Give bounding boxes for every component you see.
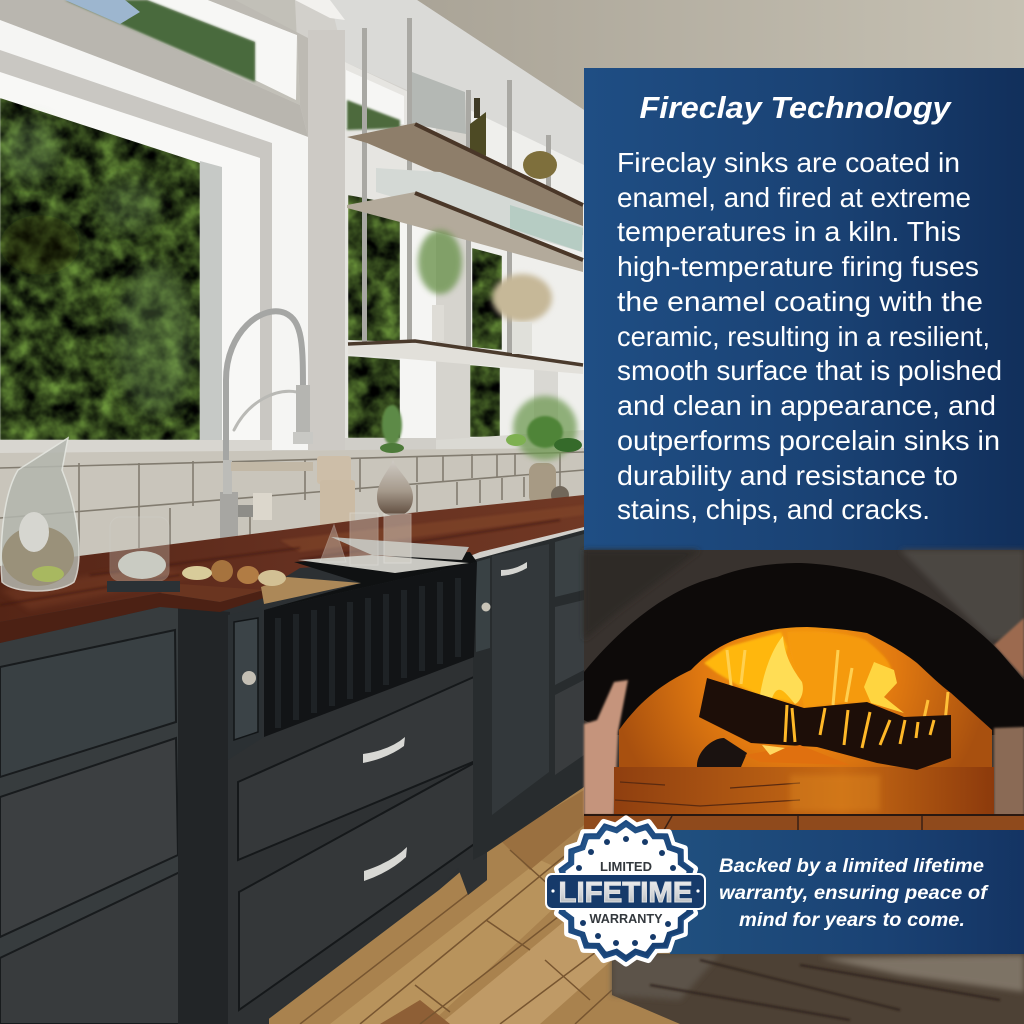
open wood shelves — [347, 18, 583, 374]
lower sink cabinet — [228, 650, 487, 1024]
garden foliage — [0, 98, 200, 440]
soffit wash — [330, 0, 584, 170]
dots — [576, 836, 676, 946]
body text: high-temperature firing fuses — [617, 251, 979, 282]
warranty band — [670, 830, 1024, 954]
oven floor — [614, 767, 994, 815]
glass pitcher and tumblers — [1, 438, 411, 592]
warranty text: mind for years to come. — [739, 910, 965, 931]
body text: smooth surface that is polished — [617, 355, 1002, 386]
fluted farmhouse sink — [264, 537, 477, 737]
bottles — [412, 72, 466, 134]
foliage light patches — [0, 120, 195, 415]
body text: the enamel coating with the — [617, 286, 983, 317]
center post and small door — [178, 607, 262, 1024]
scalloped white edge — [554, 819, 698, 963]
warranty text — [719, 856, 989, 931]
ribbon — [546, 874, 705, 909]
left cabinet — [0, 607, 190, 1024]
lower shelf — [348, 340, 583, 374]
warranty text: Backed by a limited lifetime — [719, 856, 984, 877]
white center — [564, 829, 688, 953]
middle shelf — [347, 192, 583, 272]
top transom window — [0, 0, 345, 137]
stone wall — [584, 550, 1024, 830]
corner bricks — [994, 618, 1024, 678]
label: lifetime: LIFETIME — [558, 877, 692, 909]
mugs and vases — [317, 396, 582, 532]
brick pillars — [584, 680, 628, 815]
body text: outperforms porcelain sinks in — [617, 425, 1000, 456]
body text: and clean in appearance, and — [617, 390, 996, 421]
butcher block countertop — [0, 495, 584, 643]
base wall — [0, 0, 584, 560]
panel: fireclay technology text — [584, 68, 1024, 550]
body text: stains, chips, and cracks. — [617, 494, 930, 525]
faucet — [220, 311, 313, 554]
glassware — [376, 168, 583, 252]
top shelf — [347, 123, 583, 235]
right windows — [345, 62, 584, 452]
leafy plants — [380, 396, 582, 460]
plant on shelf — [418, 230, 462, 294]
wood plank floor — [262, 785, 700, 1024]
scalloped blue ring — [556, 821, 696, 961]
heading: Fireclay Technology — [640, 90, 952, 125]
warranty text: warranty, ensuring peace of — [719, 883, 989, 904]
photo: wood-fired kiln — [584, 550, 1024, 830]
limited lifetime warranty badge — [546, 819, 705, 963]
black soot arch — [584, 563, 1024, 735]
cutting board and mushrooms — [182, 560, 361, 604]
backsplash tiles — [0, 448, 584, 566]
right cabinets — [473, 530, 584, 860]
oven interior — [619, 627, 992, 770]
body text — [617, 147, 1002, 525]
body text: Fireclay sinks are coated in — [617, 147, 960, 178]
flames — [704, 631, 948, 728]
yellow ornament — [523, 151, 557, 179]
drawer handles — [363, 737, 405, 763]
main window — [0, 20, 345, 453]
label: warranty: WARRANTY — [590, 911, 663, 926]
ceiling — [417, 0, 1024, 110]
bottom brick strip — [584, 815, 1024, 830]
body text: durability and resistance to — [617, 460, 958, 491]
stone ledge photo — [612, 954, 1024, 1024]
body text: enamel, and fired at extreme — [617, 182, 971, 213]
dried grass — [492, 274, 552, 322]
body text: temperatures in a kiln. This — [617, 216, 961, 247]
label: limited: LIMITED — [600, 859, 652, 874]
body text: ceramic, resulting in a resilient, — [617, 321, 990, 352]
ribbon dots — [551, 889, 700, 893]
burning logs — [697, 678, 951, 770]
